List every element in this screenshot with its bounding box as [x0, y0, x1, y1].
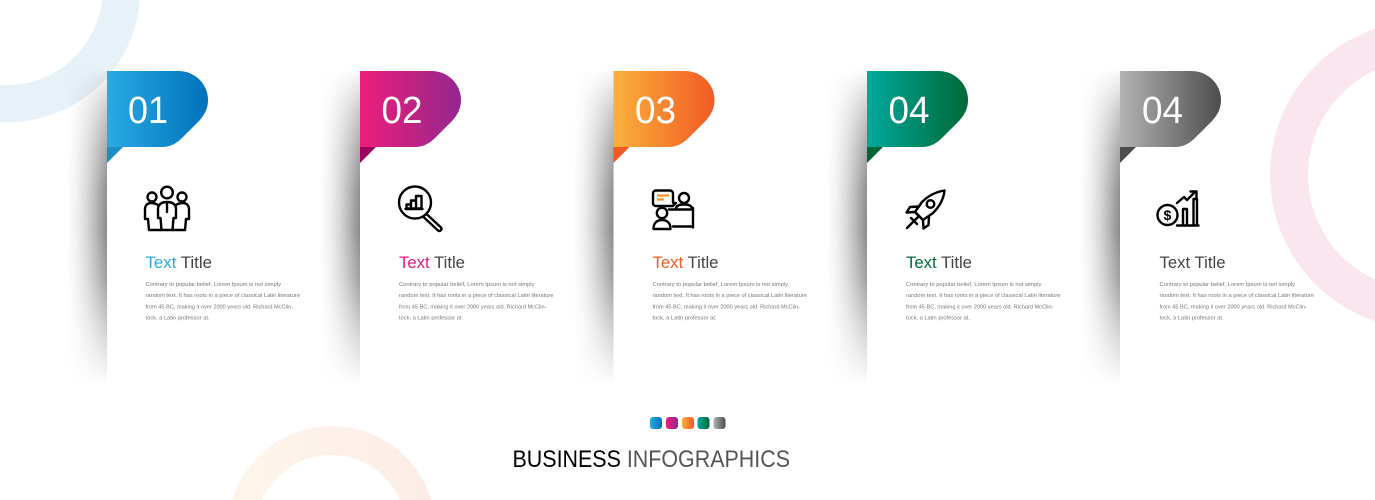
panel: step 03: [574, 71, 807, 386]
body text 03: tock, a Latin professor at.: [652, 316, 717, 322]
card shadow 01: [72, 74, 107, 376]
body text 03: [652, 282, 807, 322]
icon: team of people: [145, 187, 189, 230]
number tab 01: [107, 71, 208, 147]
card shadow 02: [326, 74, 360, 376]
number 04: 04: [888, 90, 930, 132]
body text 04: from 45 BC, making it over 2000 years old. Richard McClin-: [906, 304, 1054, 310]
text title 04: Text Title: [906, 254, 972, 272]
body text 02: [399, 282, 554, 322]
panel: step 02: [320, 71, 554, 386]
body text 01: tock, a Latin professor at.: [146, 316, 210, 322]
main heading: BUSINESS INFOGRAPHICS: [512, 446, 790, 473]
body text 05: tock, a Latin professor at.: [1160, 316, 1224, 322]
body text 02: random text. It has roots in a piece of classical Latin literature: [399, 293, 554, 299]
body text 04: random text. It has roots in a piece of classical Latin literature: [906, 293, 1060, 299]
decorative ring: right: [1270, 29, 1375, 321]
tab fold 05: [1120, 147, 1136, 163]
decorative ring: bottom: [232, 426, 432, 500]
body text 04: Contrary to popular belief, Lorem Ipsum is not simply: [906, 282, 1042, 288]
icon: money growth chart: [1158, 192, 1198, 226]
body text 01: from 45 BC, making it over 2000 years old. Richard McClin-: [146, 304, 293, 310]
card shadow 05: [1086, 74, 1120, 376]
decorative ring: top left: [0, 0, 140, 122]
body text 02: tock, a Latin professor at.: [399, 316, 463, 322]
number tab 03: [614, 71, 714, 147]
number 03: 03: [635, 90, 676, 132]
tab fold 03: [614, 147, 630, 163]
body text 05: random text. It has roots in a piece of classical Latin literature: [1160, 293, 1314, 299]
number tab 02: [360, 71, 461, 147]
chat bubble lines: [657, 196, 669, 200]
body text 05: Contrary to popular belief, Lorem Ipsum is not simply: [1160, 282, 1295, 288]
number 05: 04: [1142, 90, 1183, 132]
body text 01: [146, 282, 300, 322]
text title 02: Text Title: [399, 254, 465, 272]
body text 03: from 45 BC, making it over 2000 years old. Richard McClin-: [652, 304, 800, 310]
body text 03: random text. It has roots in a piece of classical Latin literature: [652, 293, 807, 299]
number 02: 02: [382, 90, 422, 132]
body text 05: [1160, 282, 1314, 322]
dollar sign: $: [1164, 207, 1172, 223]
text title 05: Text Title: [1160, 254, 1226, 272]
text title 03: Text Title: [652, 254, 718, 272]
colour dots row: [650, 417, 726, 429]
body text 04: tock, a Latin professor at.: [906, 316, 970, 322]
body text 01: Contrary to popular belief, Lorem Ipsum is not simply: [146, 282, 281, 288]
panel: step 05: [1080, 71, 1314, 386]
body text 02: from 45 BC, making it over 2000 years old. Richard McClin-: [399, 304, 547, 310]
card shadow 04: [832, 74, 867, 376]
body text 01: random text. It has roots in a piece of classical Latin literature: [146, 293, 300, 299]
icon: rocket: [906, 190, 944, 228]
panel: step 04: [827, 71, 1060, 386]
tab fold 04: [867, 147, 883, 163]
tab fold 01: [107, 147, 123, 163]
number 01: 01: [128, 90, 168, 132]
panel: step 01: [67, 71, 300, 386]
card shadow 03: [579, 74, 614, 376]
icon: consultation desk: [653, 190, 693, 229]
body text 05: from 45 BC, making it over 2000 years old. Richard McClin-: [1160, 304, 1307, 310]
body text 02: Contrary to popular belief, Lorem Ipsum is not simply: [399, 282, 535, 288]
body text 03: Contrary to popular belief, Lorem Ipsum is not simply: [652, 282, 788, 288]
number tab 04: [867, 71, 968, 147]
body text 04: [906, 282, 1060, 322]
icon: magnifier with chart: [399, 186, 441, 231]
number tab 05: [1120, 71, 1221, 147]
tab fold 02: [360, 147, 376, 163]
text title 01: Text Title: [146, 254, 212, 272]
